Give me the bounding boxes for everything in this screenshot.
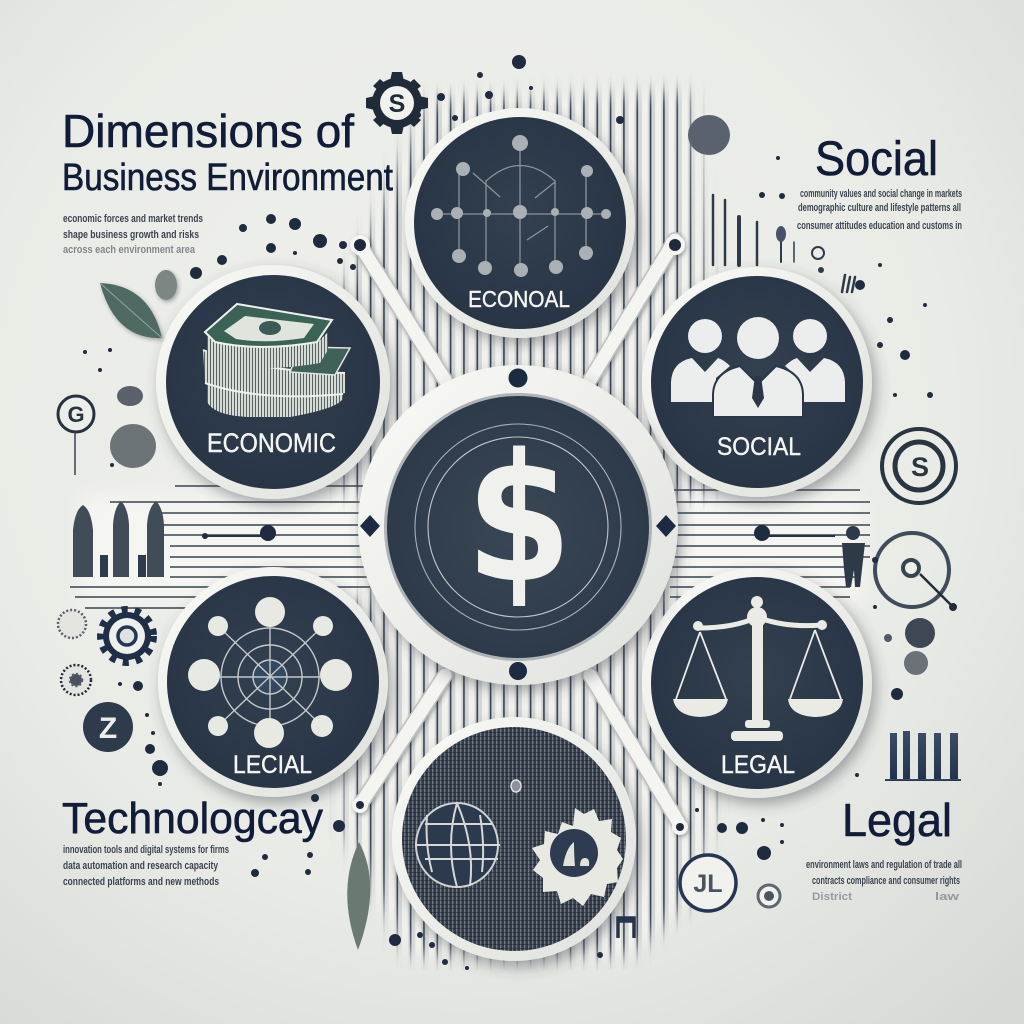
technology caption text: connected platforms and new methods: [63, 876, 219, 888]
icon: bottom ring: JL: [693, 870, 723, 898]
background horizontal stripes: [70, 486, 870, 608]
technology caption text: innovation tools and digital systems for firms: [63, 844, 229, 856]
panel: legal: [642, 568, 872, 798]
heading: Technology: Technologcay: [62, 794, 323, 843]
title caption text: across each environment area: [63, 244, 196, 256]
small mark: [511, 780, 521, 792]
title caption text: shape business growth and risks: [63, 229, 199, 241]
panel: central dollar hub: [358, 365, 678, 685]
legal caption text: District: [812, 891, 852, 903]
connector bars: [352, 237, 686, 833]
icon: S gear: [366, 72, 428, 134]
scales of justice icon: [673, 596, 843, 741]
background vertical stripes: [320, 70, 730, 970]
panel: social: [642, 267, 872, 497]
scattered dots: [83, 55, 933, 970]
hub markers: [360, 368, 676, 680]
icon: round mark: Z: [99, 712, 117, 745]
label: SOCIAL: SOCIAL: [717, 433, 801, 461]
icons: small rings left: [58, 610, 91, 695]
icon: dark emblem top right: [688, 115, 730, 155]
title: Dimensions of: [62, 105, 354, 157]
icon: target with needle: [875, 533, 957, 611]
people icon: [671, 317, 845, 417]
social caption text: [797, 188, 962, 232]
marks under social caption: [713, 195, 855, 292]
globe icon: [415, 803, 500, 887]
title: [62, 105, 393, 199]
icon: gear left: [101, 610, 153, 662]
panel: technology: [392, 717, 636, 961]
title caption text: economic forces and market trends: [63, 213, 203, 225]
icon: right S ring: [882, 429, 956, 503]
icon: bottom leaf: [347, 842, 370, 950]
network icon: [431, 135, 611, 277]
icon: S seal: G: [67, 402, 85, 427]
heading: Legal: Legal: [842, 794, 952, 846]
panel: top network: [405, 108, 635, 338]
decorative blobs left: [110, 386, 156, 468]
label: LEGAL: LEGAL: [721, 751, 795, 779]
legal caption text: [806, 859, 962, 903]
icon: right S ring: S: [911, 452, 929, 482]
technology caption text: data automation and research capacity: [63, 860, 219, 872]
panel: lower left network: [158, 567, 388, 797]
gear icon: [532, 808, 623, 906]
technology caption text: [63, 844, 229, 888]
icon: towers: [73, 501, 164, 577]
icon: bottom ring: [680, 855, 780, 911]
title caption text: [63, 213, 203, 256]
label: ECONOMIC: ECONOMIC: [207, 428, 336, 458]
heading: Social: Social: [815, 133, 938, 186]
icon: dollar sign: $: [466, 416, 572, 622]
money stack icon: [203, 304, 350, 417]
hub network icon: [188, 597, 352, 748]
icon: round mark: [83, 702, 133, 752]
icon: person: [842, 526, 865, 587]
decorative blobs right: [884, 618, 935, 675]
icon: S seal: [58, 396, 94, 475]
icon: leaf: [100, 270, 177, 338]
panel: economic: [156, 265, 390, 499]
label: ECONOAL: ECONOAL: [468, 286, 570, 312]
icon: music note: [618, 918, 634, 938]
label: LECIAL: LECIAL: [233, 751, 312, 779]
legal caption text: law: [935, 891, 960, 903]
icon: bars: [885, 731, 961, 781]
title: Business Environment: [62, 157, 393, 199]
icon: S gear: S: [389, 90, 405, 118]
